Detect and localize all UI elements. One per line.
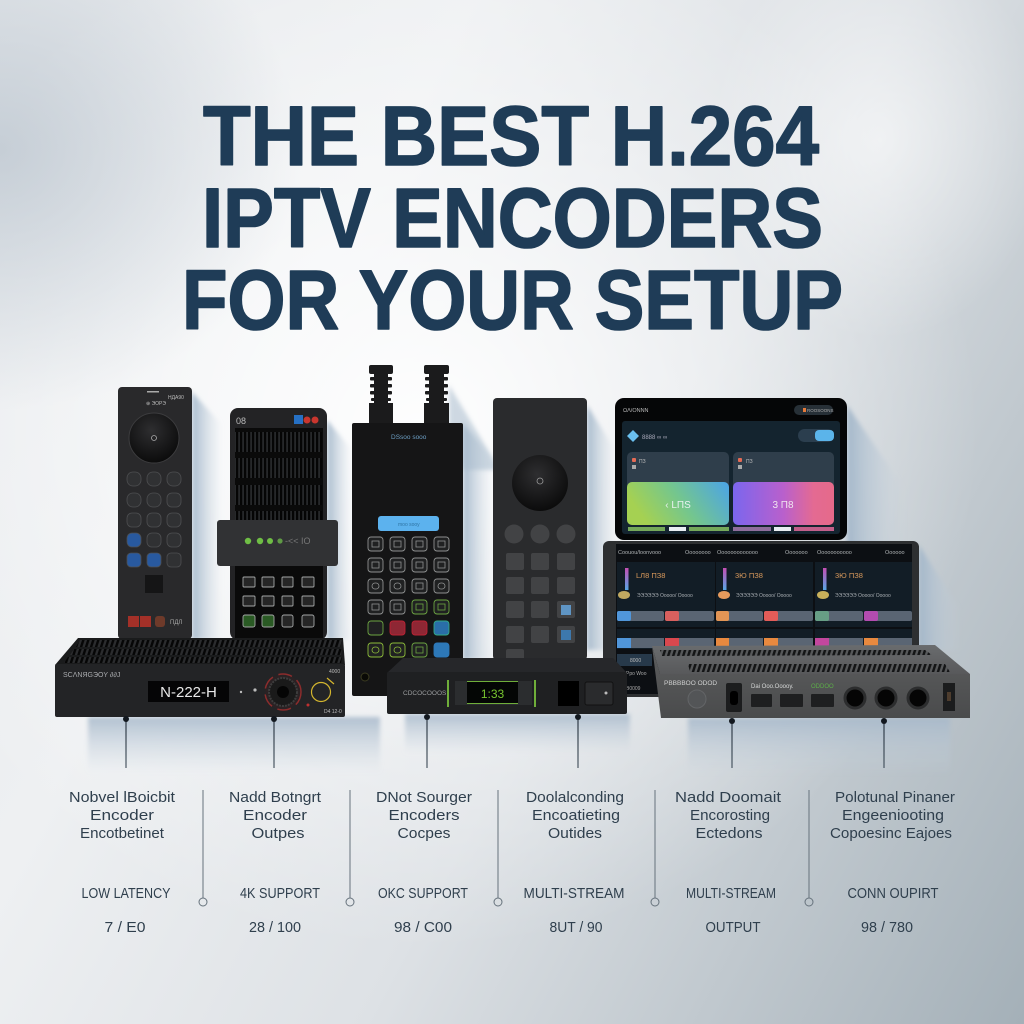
column 6 text: Polotunal Pinaner <box>835 789 955 806</box>
column 2 text: 4K SUPPORT <box>240 886 320 902</box>
monitor values: LЛ8 ПЗ8 <box>636 571 665 580</box>
right remote dial <box>512 455 568 511</box>
tablet card right: 3 П8 <box>772 500 794 511</box>
column 5 text: Encorosting <box>690 807 770 824</box>
monitor captions: ЭЭЭЭЭЭ Ооооо/ Ооооо <box>835 593 891 599</box>
monitor captions: ЭЭЭЭЭЭ Ооооо/ Ооооо <box>736 593 792 599</box>
column 5 text: OUTPUT <box>706 920 761 936</box>
monitor lower left rows: B0009 <box>626 686 641 692</box>
monitor lower left rows: 8000 <box>630 658 641 664</box>
vent label and indicators: 08 <box>236 416 246 426</box>
compact label: CDCOCOOOS <box>403 690 447 697</box>
column 6 text: Copoesinc Eajoes <box>830 825 952 842</box>
grey box sockets <box>845 688 928 708</box>
column 4 text <box>524 789 624 936</box>
grey box switch <box>943 683 955 711</box>
monitor headers: Oooooooo <box>685 550 711 556</box>
column 5 text: Nadd Doomait <box>675 789 782 806</box>
status band <box>217 520 338 566</box>
column 4 text: Outides <box>548 825 602 842</box>
grey box label: PBBBBOO ODOD <box>664 680 717 687</box>
column 4 text: MULTI-STREAM <box>524 886 624 902</box>
box yellow ring <box>312 678 334 702</box>
device: remote control right <box>493 398 587 661</box>
compact display: 1:33 <box>481 687 505 701</box>
box small marks: 4000 <box>329 669 340 675</box>
device: tablet dashboard <box>615 398 847 540</box>
monitor captions <box>637 593 891 599</box>
column 2 text: Nadd Botngrt <box>229 789 322 806</box>
monitor values: 3Ю ПЗ8 <box>735 571 763 580</box>
encoder brand: DSsoo sooo <box>391 434 427 441</box>
encoder blue button <box>378 516 439 531</box>
status band: -<< IO <box>285 536 311 546</box>
monitor headers: Oooooo <box>885 550 905 556</box>
grey box text: Dai Ooo.Ooooy. <box>751 684 794 690</box>
compact switch <box>585 682 613 705</box>
column 1 text <box>69 789 176 936</box>
monitor headers <box>618 550 905 556</box>
monitor headers: Ooooooo <box>785 550 808 556</box>
tablet header: ΩΛ/ΟΝΝΝ <box>623 408 649 414</box>
device shadows <box>88 375 960 774</box>
tablet card left: ПЗ <box>639 459 646 465</box>
box volume knob <box>265 674 301 710</box>
device: antenna encoder <box>352 365 500 696</box>
box top vents <box>55 638 345 665</box>
column 4 text: Doolalconding <box>526 789 624 806</box>
tablet card left <box>627 452 729 525</box>
column 3 text: DNot Sourger <box>376 789 472 806</box>
tablet diamond logo: 8888 ∞ ∞ <box>642 435 667 441</box>
device: vented unit <box>217 408 338 640</box>
tablet card left: ‹ LПS <box>665 500 691 511</box>
vent unit icon grid <box>243 577 314 627</box>
column 2 text: 28 / 100 <box>249 920 301 936</box>
grey box buttons <box>751 694 834 707</box>
column 3 text <box>376 789 472 936</box>
title: IPTV ENCODERS <box>202 171 823 265</box>
title: THE BEST H.264 <box>203 89 819 183</box>
vent label and indicators <box>236 415 318 426</box>
column 6 text <box>830 789 955 936</box>
grey box text <box>751 684 834 690</box>
tablet header: ROOSOONS <box>807 408 834 413</box>
monitor captions: ЭЭЭЭЭЭ Ооооо/ Ооооо <box>637 593 693 599</box>
tablet progress strips <box>628 527 834 531</box>
antenna shadow <box>449 385 500 470</box>
column 6 text: 98 / 780 <box>861 920 913 936</box>
column 1 text: 7 / E0 <box>104 920 146 936</box>
device: remote control left <box>118 387 192 639</box>
encoder power light <box>361 673 369 681</box>
grey box logo disc <box>688 690 706 708</box>
monitor values <box>636 571 863 580</box>
column 1 text: Encotbetinet <box>80 825 165 842</box>
box display: N-222-H <box>160 684 217 701</box>
tablet header <box>623 405 834 415</box>
title: FOR YOUR SETUP <box>182 253 843 347</box>
column 1 text: Nobvel lBoicbit <box>69 789 176 806</box>
box small marks: D4 12-0 <box>324 709 342 715</box>
compact display <box>447 680 536 707</box>
column divider lines with end circles <box>199 790 813 906</box>
encoder blue button: moo sooy <box>398 522 420 528</box>
tablet toggle <box>798 429 834 442</box>
remote red buttons <box>128 616 182 627</box>
column 2 text: Encoder <box>243 807 307 824</box>
monitor headers: Coouou/loonvooo <box>618 550 661 556</box>
device: grey encoder box right <box>652 645 970 718</box>
device: compact encoder box centre <box>387 658 627 714</box>
column 3 text: 98 / C00 <box>394 920 452 936</box>
monitor headers: Ooooooooooo <box>817 550 852 556</box>
column 4 text: 8UT / 90 <box>550 920 602 936</box>
column 6 text: Engeeniooting <box>842 807 944 824</box>
column 6 text: CONN OUPIRT <box>848 886 939 902</box>
column 5 text <box>675 789 782 936</box>
column 3 text: Cocpes <box>398 825 450 842</box>
tablet card right <box>733 452 834 525</box>
device: monitor dashboard <box>603 541 919 697</box>
remote labels: ⊕ ЭОРЭ <box>146 401 166 407</box>
box small marks <box>240 669 342 715</box>
remote red buttons: ПДЛ <box>170 620 182 626</box>
monitor lower left rows <box>617 654 652 692</box>
encoder key grid <box>368 537 449 657</box>
column 5 text: Ectedons <box>696 825 762 842</box>
monitor lower left rows: Ppo Woo <box>626 671 647 677</box>
antennas <box>369 365 449 425</box>
compact black port <box>558 681 579 706</box>
column 1 text: LOW LATENCY <box>82 886 171 902</box>
column 5 text: MULTI-STREAM <box>686 886 776 902</box>
column 3 text: OKC SUPPORT <box>378 886 468 902</box>
monitor gauges <box>618 568 829 599</box>
device: main encoder box left <box>55 638 345 717</box>
monitor status pills <box>617 611 912 648</box>
remote labels <box>146 391 184 407</box>
title <box>182 89 843 347</box>
encoder key inner marks <box>372 541 445 653</box>
monitor headers: Ooooooooooooo <box>717 550 758 556</box>
column 1 text: Encoder <box>90 807 154 824</box>
monitor panels <box>617 562 912 649</box>
remote button grid <box>127 472 181 567</box>
remote square button <box>145 575 163 593</box>
column 2 text <box>229 789 322 936</box>
column 4 text: Encoatieting <box>532 807 620 824</box>
remote labels: НДА90 <box>168 395 184 401</box>
right remote buttons <box>504 524 576 661</box>
grey box text: ODDOO <box>811 684 834 690</box>
box label: SCΛNЯGЭOY ∂∂J <box>63 672 120 679</box>
monitor values: 3Ю ПЗ8 <box>835 571 863 580</box>
column 3 text: Encoders <box>388 807 460 824</box>
column 2 text: Outpes <box>252 825 304 842</box>
vent grilles <box>235 432 322 521</box>
connector lines <box>123 714 887 768</box>
grey box slot <box>726 683 742 712</box>
remote dial <box>129 413 179 463</box>
tablet card right: ПЗ <box>746 459 753 465</box>
tablet diamond logo <box>627 430 667 442</box>
box display <box>148 681 229 702</box>
